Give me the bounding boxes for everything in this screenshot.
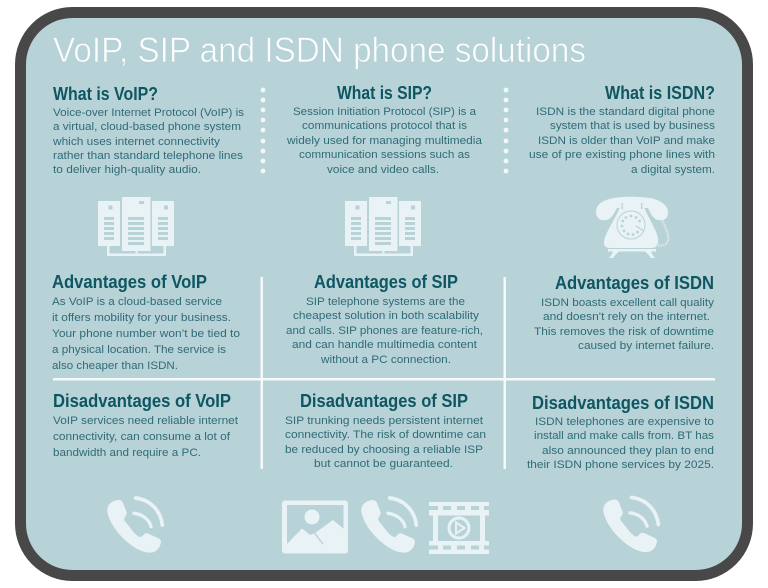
body text: [529, 106, 715, 176]
body text: Your phone number won’t be tied to: [52, 328, 240, 340]
body text: and calls. SIP phones are feature-rich,: [286, 325, 483, 337]
panel: what is ISDN: [529, 83, 715, 176]
heading: Advantages of ISDN: [555, 273, 714, 293]
body text: widely used for managing multimedia: [286, 135, 483, 147]
body text: [286, 296, 483, 366]
body text: ISDN is the standard digital phone: [536, 106, 715, 118]
panel: what is VoIP: [52, 84, 244, 176]
body text: ISDN is older than VoIP and make: [538, 135, 715, 147]
body text: [52, 107, 244, 176]
body text: also announced they plan to end: [542, 445, 714, 457]
body text: without a PC connection.: [320, 354, 451, 366]
body text: voice and video calls.: [327, 164, 439, 176]
body text: [286, 106, 483, 176]
body text: and can handle multimedia content: [292, 339, 478, 351]
panel: advantages of VoIP: [52, 272, 240, 372]
title: VoIP, SIP and ISDN phone solutions: [53, 31, 586, 70]
icon: picture: [282, 500, 348, 554]
body text: [285, 415, 486, 470]
heading: What is SIP?: [337, 83, 432, 103]
heading: Disadvantages of SIP: [300, 391, 468, 411]
heading: Advantages of VoIP: [52, 272, 207, 292]
body text: ISDN boasts excellent call quality: [541, 297, 714, 309]
body text: and doesn't rely on the internet.: [543, 311, 710, 323]
body text: a virtual, cloud-based phone system: [53, 121, 241, 133]
body text: This removes the risk of downtime: [534, 326, 714, 338]
body text: their ISDN phone services by 2025.: [527, 459, 714, 471]
body text: SIP trunking needs persistent internet: [285, 415, 484, 427]
panel: disadvantages of VoIP: [53, 391, 239, 459]
panel: advantages of ISDN: [534, 273, 714, 352]
icon: phone call SIP: [361, 498, 416, 553]
icon: phone call ISDN: [603, 497, 658, 552]
body text: connectivity. The risk of downtime can: [285, 429, 486, 441]
body text: [52, 296, 240, 372]
body text: it offers mobility for your business.: [52, 312, 231, 324]
icon: servers SIP: [345, 197, 421, 256]
body text: [53, 415, 239, 459]
body text: VoIP services need reliable internet: [53, 415, 239, 427]
body text: SIP telephone systems are the: [306, 296, 465, 308]
body text: [534, 297, 714, 352]
heading: Advantages of SIP: [314, 272, 458, 292]
panel: advantages of SIP: [286, 272, 483, 366]
icon: servers VoIP: [98, 197, 174, 256]
body text: As VoIP is a cloud-based service: [52, 296, 222, 308]
body text: communication sessions such as: [299, 149, 470, 161]
body text: to deliver high-quality audio.: [53, 164, 201, 176]
body text: system that is used by business: [550, 120, 715, 132]
body text: caused by internet failure.: [578, 340, 714, 352]
heading: Disadvantages of VoIP: [53, 391, 231, 411]
icon: rotary telephone: [596, 197, 668, 258]
panel: disadvantages of SIP: [285, 391, 486, 470]
body text: Voice-over Internet Protocol (VoIP) is: [53, 107, 244, 119]
body text: but cannot be guaranteed.: [314, 458, 453, 470]
body text: which uses internet connectivity: [52, 136, 220, 148]
icon: film strip with play button: [429, 502, 489, 554]
body text: use of pre existing phone lines with: [529, 149, 715, 161]
body text: communications protocol that is: [302, 120, 467, 132]
panel: disadvantages of ISDN: [527, 393, 714, 471]
body text: also cheaper than ISDN.: [52, 360, 178, 372]
body text: connectivity, can consume a lot of: [53, 431, 231, 443]
body text: bandwidth and require a PC.: [53, 447, 201, 459]
body text: be reduced by choosing a reliable ISP: [285, 444, 483, 456]
body text: install and make calls from. BT has: [534, 430, 714, 442]
body text: a physical location. The service is: [52, 344, 226, 356]
body text: rather than standard telephone lines: [53, 150, 243, 162]
body text: a digital system.: [631, 164, 715, 176]
panel: what is SIP: [286, 83, 483, 176]
body text: cheapest solution in both scalability: [293, 310, 479, 322]
heading: What is ISDN?: [605, 83, 715, 103]
body text: [527, 416, 714, 471]
body text: Session Initiation Protocol (SIP) is a: [293, 106, 477, 118]
heading: Disadvantages of ISDN: [532, 393, 714, 413]
heading: What is VoIP?: [53, 84, 158, 104]
icon: phone call VoIP: [107, 498, 162, 553]
body text: ISDN telephones are expensive to: [535, 416, 714, 428]
